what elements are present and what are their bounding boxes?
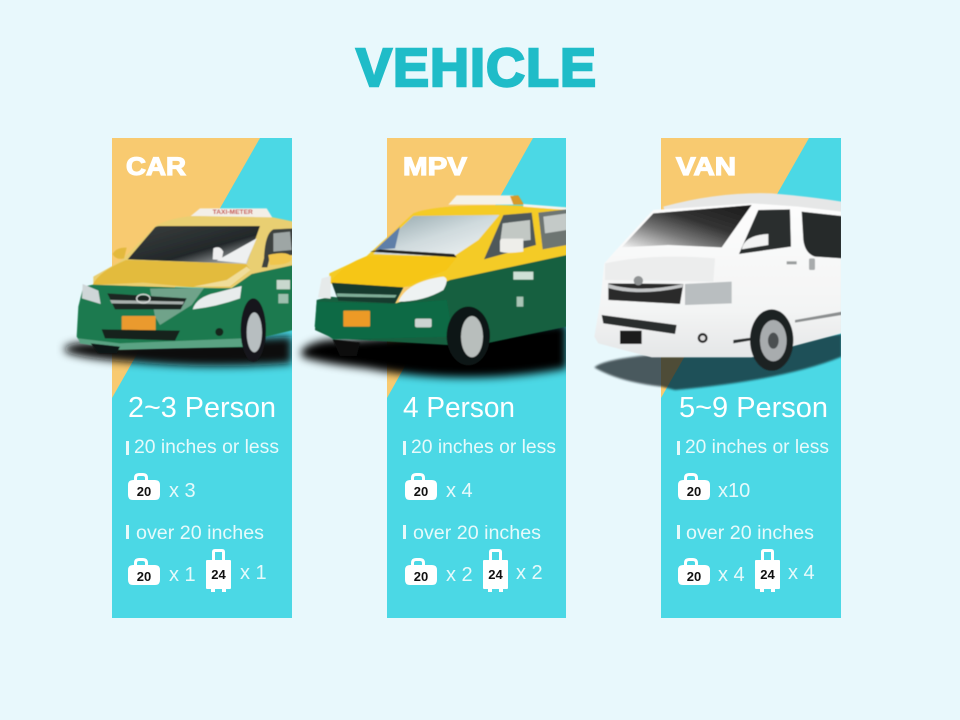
icon: 24 inch suitcase: 24: [488, 567, 503, 582]
panel: van: [594, 138, 842, 618]
image: green and yellow taxi sedan: [65, 208, 293, 366]
icon: 20 inch bag: [128, 558, 160, 585]
text: 20 inches or less: 20 inches or less: [685, 437, 829, 458]
count: x 4: [788, 562, 815, 584]
marker: [126, 441, 129, 455]
text: over 20 inches: over 20 inches: [136, 523, 264, 544]
image: white passenger van: [594, 193, 842, 390]
label: CAR: CAR: [126, 153, 186, 181]
icon: 20 inch bag: [678, 558, 710, 585]
icon: 20 inch bag: 20: [414, 484, 428, 499]
icon: 24 inch suitcase: [755, 549, 780, 592]
count: x 2: [446, 564, 473, 586]
marker: [677, 525, 680, 539]
panel: mpv: [302, 138, 567, 618]
icon: 24 inch suitcase: 24: [760, 567, 775, 582]
marker: [677, 441, 680, 455]
count: x10: [718, 480, 750, 502]
title: VEHICLE: [356, 38, 596, 98]
image: green and yellow taxi MPV: [302, 195, 567, 377]
icon: 20 inch bag: [405, 473, 437, 500]
label: VAN: VAN: [676, 153, 736, 181]
icon: 24 inch suitcase: 24: [211, 567, 226, 582]
icon: 24 inch suitcase: [483, 549, 508, 592]
count: x 4: [718, 564, 745, 586]
icon: 20 inch bag: [678, 473, 710, 500]
marker: [403, 441, 406, 455]
icon: 20 inch bag: 20: [137, 569, 151, 584]
count: x 1: [240, 562, 267, 584]
icon: 20 inch bag: 20: [414, 569, 428, 584]
heading: capacity: 2~3 Person: [128, 392, 276, 424]
icon: 20 inch bag: 20: [687, 569, 701, 584]
count: x 2: [516, 562, 543, 584]
icon: 24 inch suitcase: [206, 549, 231, 592]
panel: car: [65, 138, 293, 618]
heading: capacity: 5~9 Person: [679, 392, 828, 424]
text: over 20 inches: over 20 inches: [413, 523, 541, 544]
icon: 20 inch bag: [405, 558, 437, 585]
text: 20 inches or less: 20 inches or less: [411, 437, 556, 458]
label: MPV: MPV: [403, 153, 467, 181]
icon: 20 inch bag: 20: [687, 484, 701, 499]
heading: capacity: 4 Person: [403, 392, 515, 424]
image: green and yellow taxi sedan: TAXI-METER: [213, 209, 253, 216]
text: 20 inches or less: 20 inches or less: [134, 437, 279, 458]
marker: [403, 525, 406, 539]
count: x 3: [169, 480, 196, 502]
icon: 20 inch bag: [128, 473, 160, 500]
icon: 20 inch bag: 20: [137, 484, 151, 499]
count: x 4: [446, 480, 473, 502]
marker: [126, 525, 129, 539]
count: x 1: [169, 564, 196, 586]
text: over 20 inches: over 20 inches: [686, 523, 814, 544]
